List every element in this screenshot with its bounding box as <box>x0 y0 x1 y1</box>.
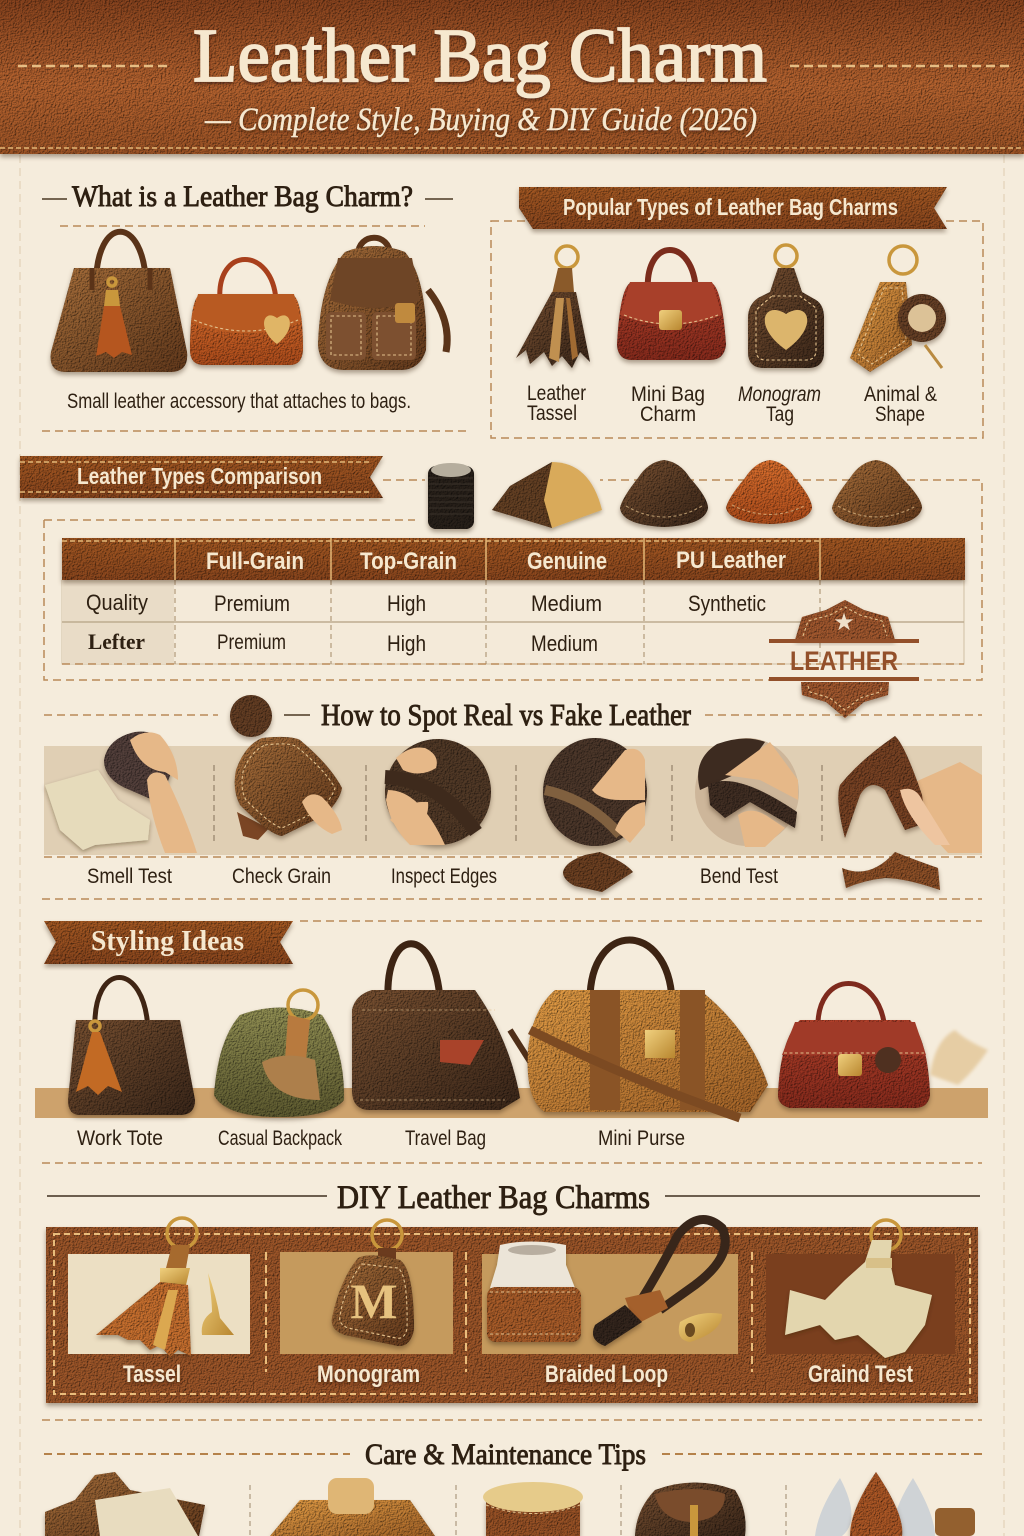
comparison table <box>62 538 965 664</box>
ribbon heading <box>20 456 383 498</box>
panel: popular types <box>491 187 983 438</box>
icon: small bag <box>635 1482 746 1536</box>
comparison table: PU Leather <box>676 547 786 574</box>
icon: leather and cloth <box>45 1472 205 1536</box>
table rows: Quality <box>86 590 148 615</box>
comparison table: Top-Grain <box>360 548 457 575</box>
table rows: High <box>387 591 426 616</box>
icon: wallet and tin <box>270 1478 435 1536</box>
type labels: Charm <box>640 403 696 426</box>
leather badge: LEATHER <box>790 646 898 676</box>
heading: How to Spot Real vs Fake Leather <box>321 697 692 732</box>
table rows: Synthetic <box>688 591 766 616</box>
ribbon heading <box>519 187 947 229</box>
icon: flex leather <box>695 738 799 847</box>
panel: DIY leather <box>46 1218 978 1403</box>
icon: bend test <box>838 736 982 853</box>
table rows: Medium <box>531 591 602 616</box>
test labels: Inspect Edges <box>391 865 497 888</box>
icon: wavy leather strip <box>842 852 940 890</box>
leather badge <box>769 600 919 718</box>
type labels <box>527 382 937 426</box>
header banner <box>0 0 1024 154</box>
icon: conditioner jar <box>487 1242 581 1342</box>
icon: polishing cloth <box>785 1220 932 1358</box>
icon: water drops <box>815 1472 975 1536</box>
icon: braided loop <box>593 1219 725 1346</box>
type labels: Tag <box>766 403 794 426</box>
icon: large duffel <box>528 940 768 1118</box>
section: what is a leather bag charm <box>42 180 470 431</box>
styling labels: Travel Bag <box>405 1127 486 1150</box>
test labels: Check Grain <box>232 865 331 888</box>
icon: red purse <box>778 984 930 1108</box>
table rows: High <box>387 631 426 656</box>
type labels: Shape <box>875 403 925 426</box>
DIY labels: Tassel <box>123 1361 181 1388</box>
icon: monogram tag: M <box>350 1273 398 1329</box>
section: care and maintenance <box>44 1438 982 1536</box>
test strip <box>44 746 982 855</box>
styling labels <box>77 1127 685 1150</box>
icon: casual backpack <box>214 990 344 1117</box>
icon: mini bag charm <box>617 250 726 360</box>
icon: thread spool <box>428 463 474 529</box>
icon: smell test <box>45 732 197 853</box>
section: styling ideas <box>35 921 988 1163</box>
icon: orange mini bag <box>190 260 303 365</box>
ribbon heading: Popular Types of Leather Bag Charms <box>563 194 898 220</box>
icon: inspect edges <box>385 739 491 845</box>
comparison table: Full-Grain <box>206 548 304 575</box>
shelf <box>35 1088 988 1118</box>
swatches <box>68 1254 250 1354</box>
table rows <box>86 590 766 656</box>
test labels: Smell Test <box>87 865 172 888</box>
DIY labels: Monogram <box>317 1361 420 1388</box>
icon: check grain <box>235 737 342 840</box>
icon: travel bag <box>352 944 548 1110</box>
heading: Care & Maintenance Tips <box>365 1438 646 1471</box>
test labels: Bend Test <box>700 865 778 888</box>
heading: What is a Leather Bag Charm? <box>72 180 413 213</box>
icon: curled leather piece <box>563 852 633 892</box>
icon: tassel kit <box>96 1218 234 1357</box>
icon: wooden jar <box>483 1482 583 1536</box>
type labels: Animal & <box>864 383 937 406</box>
styling labels: Mini Purse <box>598 1127 685 1150</box>
DIY labels <box>123 1361 913 1388</box>
styling labels: Work Tote <box>77 1127 163 1150</box>
table header <box>62 538 965 580</box>
decorative leaves <box>930 1030 988 1085</box>
DIY labels: Graind Test <box>808 1361 913 1388</box>
table rows: Premium <box>217 631 286 654</box>
icon: monogram tag <box>332 1220 414 1346</box>
description: Small leather accessory that attaches to bags. <box>67 390 411 413</box>
icon: backpack <box>318 238 447 370</box>
icon: pinch leather <box>543 738 647 846</box>
comparison table: Genuine <box>527 548 607 575</box>
title: Leather Bag Charm <box>193 14 767 98</box>
section: leather types comparison <box>20 456 982 718</box>
table body <box>62 580 964 664</box>
type labels: Monogram <box>738 383 821 406</box>
ribbon heading: Leather Types Comparison <box>77 463 322 489</box>
heading: DIY Leather Bag Charms <box>337 1180 650 1216</box>
section: DIY <box>42 1180 982 1420</box>
styling labels: Casual Backpack <box>218 1127 342 1150</box>
test labels <box>87 865 778 888</box>
table rows: Medium <box>531 631 598 656</box>
icon: brown tote <box>51 232 187 372</box>
leather badge: ★ <box>833 609 855 636</box>
leather swatches <box>492 460 922 528</box>
icon: animal and shape charm <box>850 246 946 372</box>
ribbon heading <box>44 921 293 964</box>
type labels: Tassel <box>527 402 577 425</box>
icon: tassel charm <box>516 246 590 368</box>
section: how to spot real vs fake <box>42 695 982 899</box>
type labels: Mini Bag <box>631 383 705 406</box>
icon: monogram tag <box>748 245 824 368</box>
table rows: Premium <box>214 591 290 616</box>
DIY labels: Braided Loop <box>545 1361 668 1388</box>
icon: work tote <box>68 978 195 1115</box>
type labels: Leather <box>527 382 586 405</box>
table rows: Lefter <box>88 629 145 654</box>
ribbon heading: Styling Ideas <box>91 925 244 957</box>
subtitle: — Complete Style, Buying & DIY Guide (2026) <box>204 102 757 138</box>
